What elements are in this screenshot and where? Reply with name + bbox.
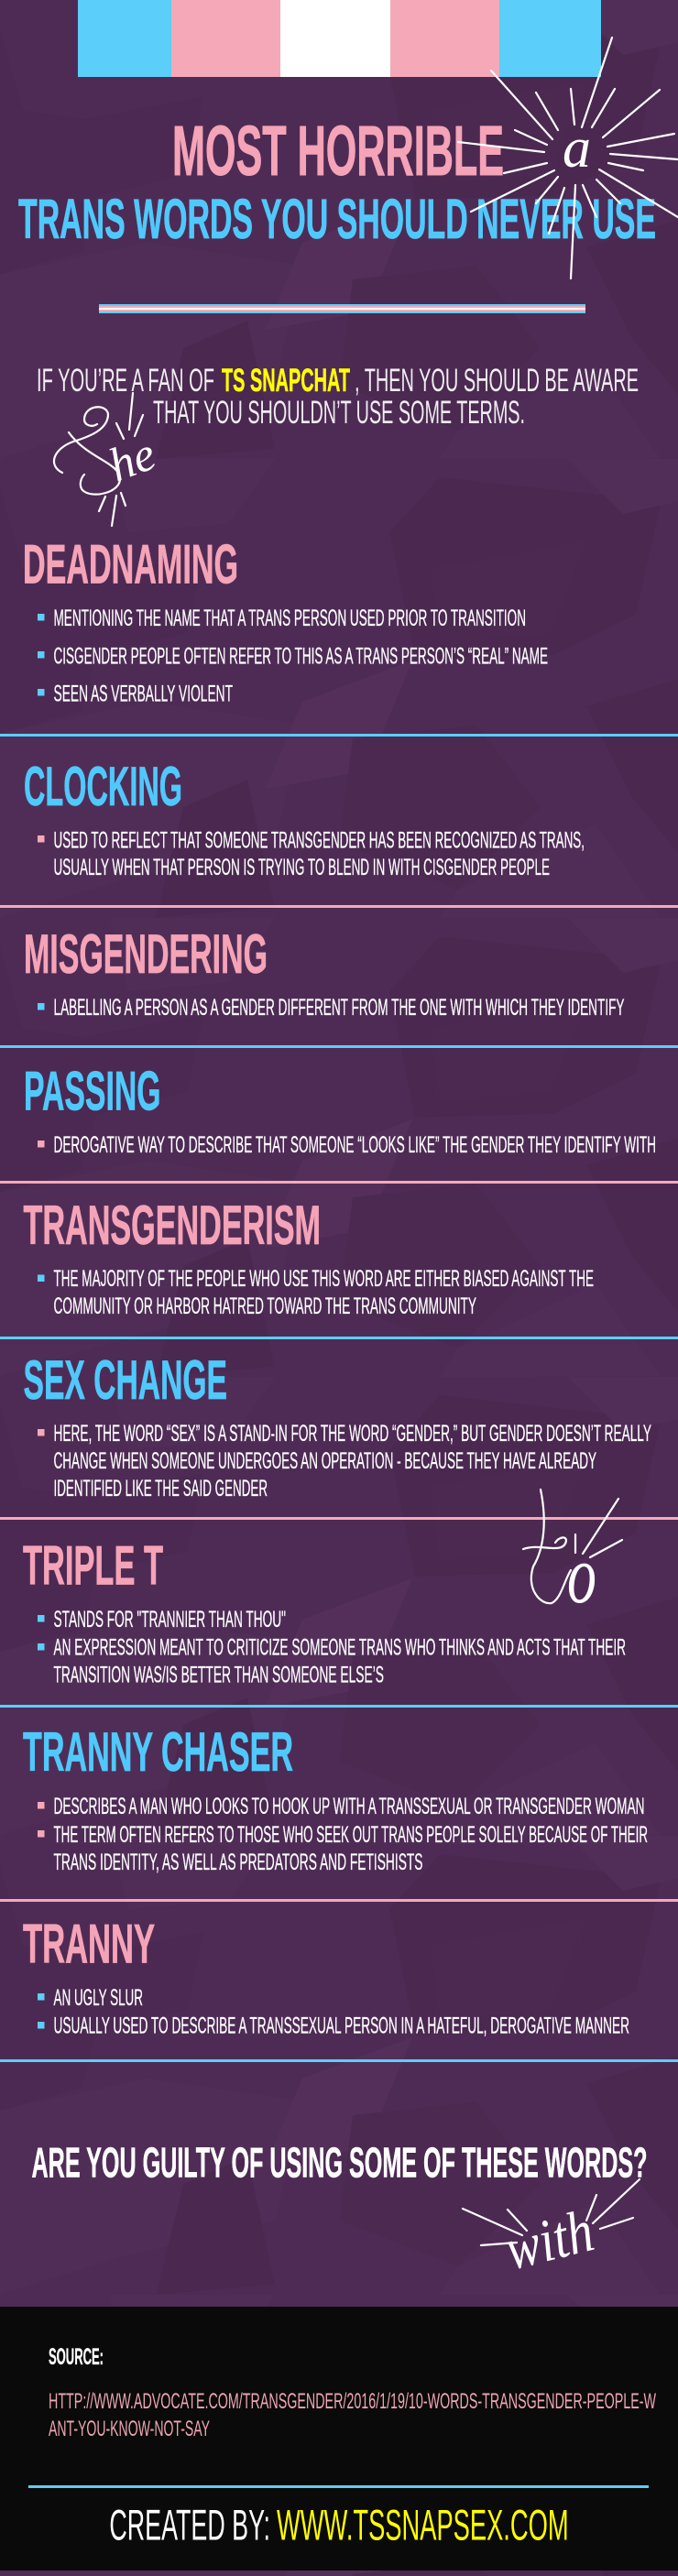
bullet list: IDENTIFIED LIKE THE SAID GENDER [53,1476,268,1501]
bullet list: STANDS FOR "TRANNIER THAN THOU" [53,1607,286,1632]
bullet list [38,1607,626,1688]
heading: SEX CHANGE [24,1349,227,1411]
panel: clocking [24,756,585,880]
bullet list: SEEN AS VERBALLY VIOLENT [53,682,233,707]
heading: DEADNAMING [23,533,238,595]
icon: handwritten to with rays: o [567,1530,596,1621]
heading: TRANNY CHASER [23,1721,293,1783]
credit line [109,2501,569,2549]
bullet list [38,1266,594,1319]
icon: handwritten She with rays [54,393,162,526]
panel: triple t [23,1535,626,1688]
icon: handwritten to with rays [523,1490,622,1621]
bullet list [38,606,548,707]
trans flag banner [78,0,601,77]
bullet list: AN UGLY SLUR [53,1985,143,2011]
heading: CLOCKING [24,756,182,817]
heading: TRIPLE T [23,1535,163,1596]
source label: SOURCE: [49,2344,104,2370]
icon: handwritten a with rays [458,38,678,278]
panel: tranny [23,1913,629,2039]
panel: transgenderism [24,1195,594,1319]
intro text [37,363,639,431]
panel: misgendering [24,923,625,1021]
icon: handwritten with and rays [463,2179,640,2284]
icon: handwritten a with rays: a [563,117,591,180]
panel: passing [24,1061,656,1158]
bullet list [38,1421,651,1501]
bullet list [38,1985,629,2039]
bullet list [38,1794,648,1875]
heading: PASSING [24,1061,161,1122]
title [18,112,656,250]
icon: handwritten She with rays: he [103,428,162,492]
footer panel [0,2307,678,2571]
bullet list: TRANSITION WAS/IS BETTER THAN SOMEONE ELSE’S [53,1663,384,1688]
intro text: TS SNAPCHAT [222,363,350,398]
source url: ANT-YOU-KNOW-NOT-SAY [49,2417,210,2441]
heading: MISGENDERING [24,923,268,985]
flag divider [99,304,585,313]
panel: sex change [24,1349,651,1501]
source url [49,2389,656,2441]
heading: TRANSGENDERISM [24,1195,321,1256]
bullet list [38,828,585,880]
icon: handwritten with and rays: with [498,2197,600,2284]
credit line: CREATED BY: [109,2501,270,2549]
intro text: IF YOU’RE A FAN OF [37,363,214,398]
panel: tranny chaser [23,1721,648,1875]
heading: TRANNY [23,1913,155,1975]
panel: deadnaming [23,533,548,707]
